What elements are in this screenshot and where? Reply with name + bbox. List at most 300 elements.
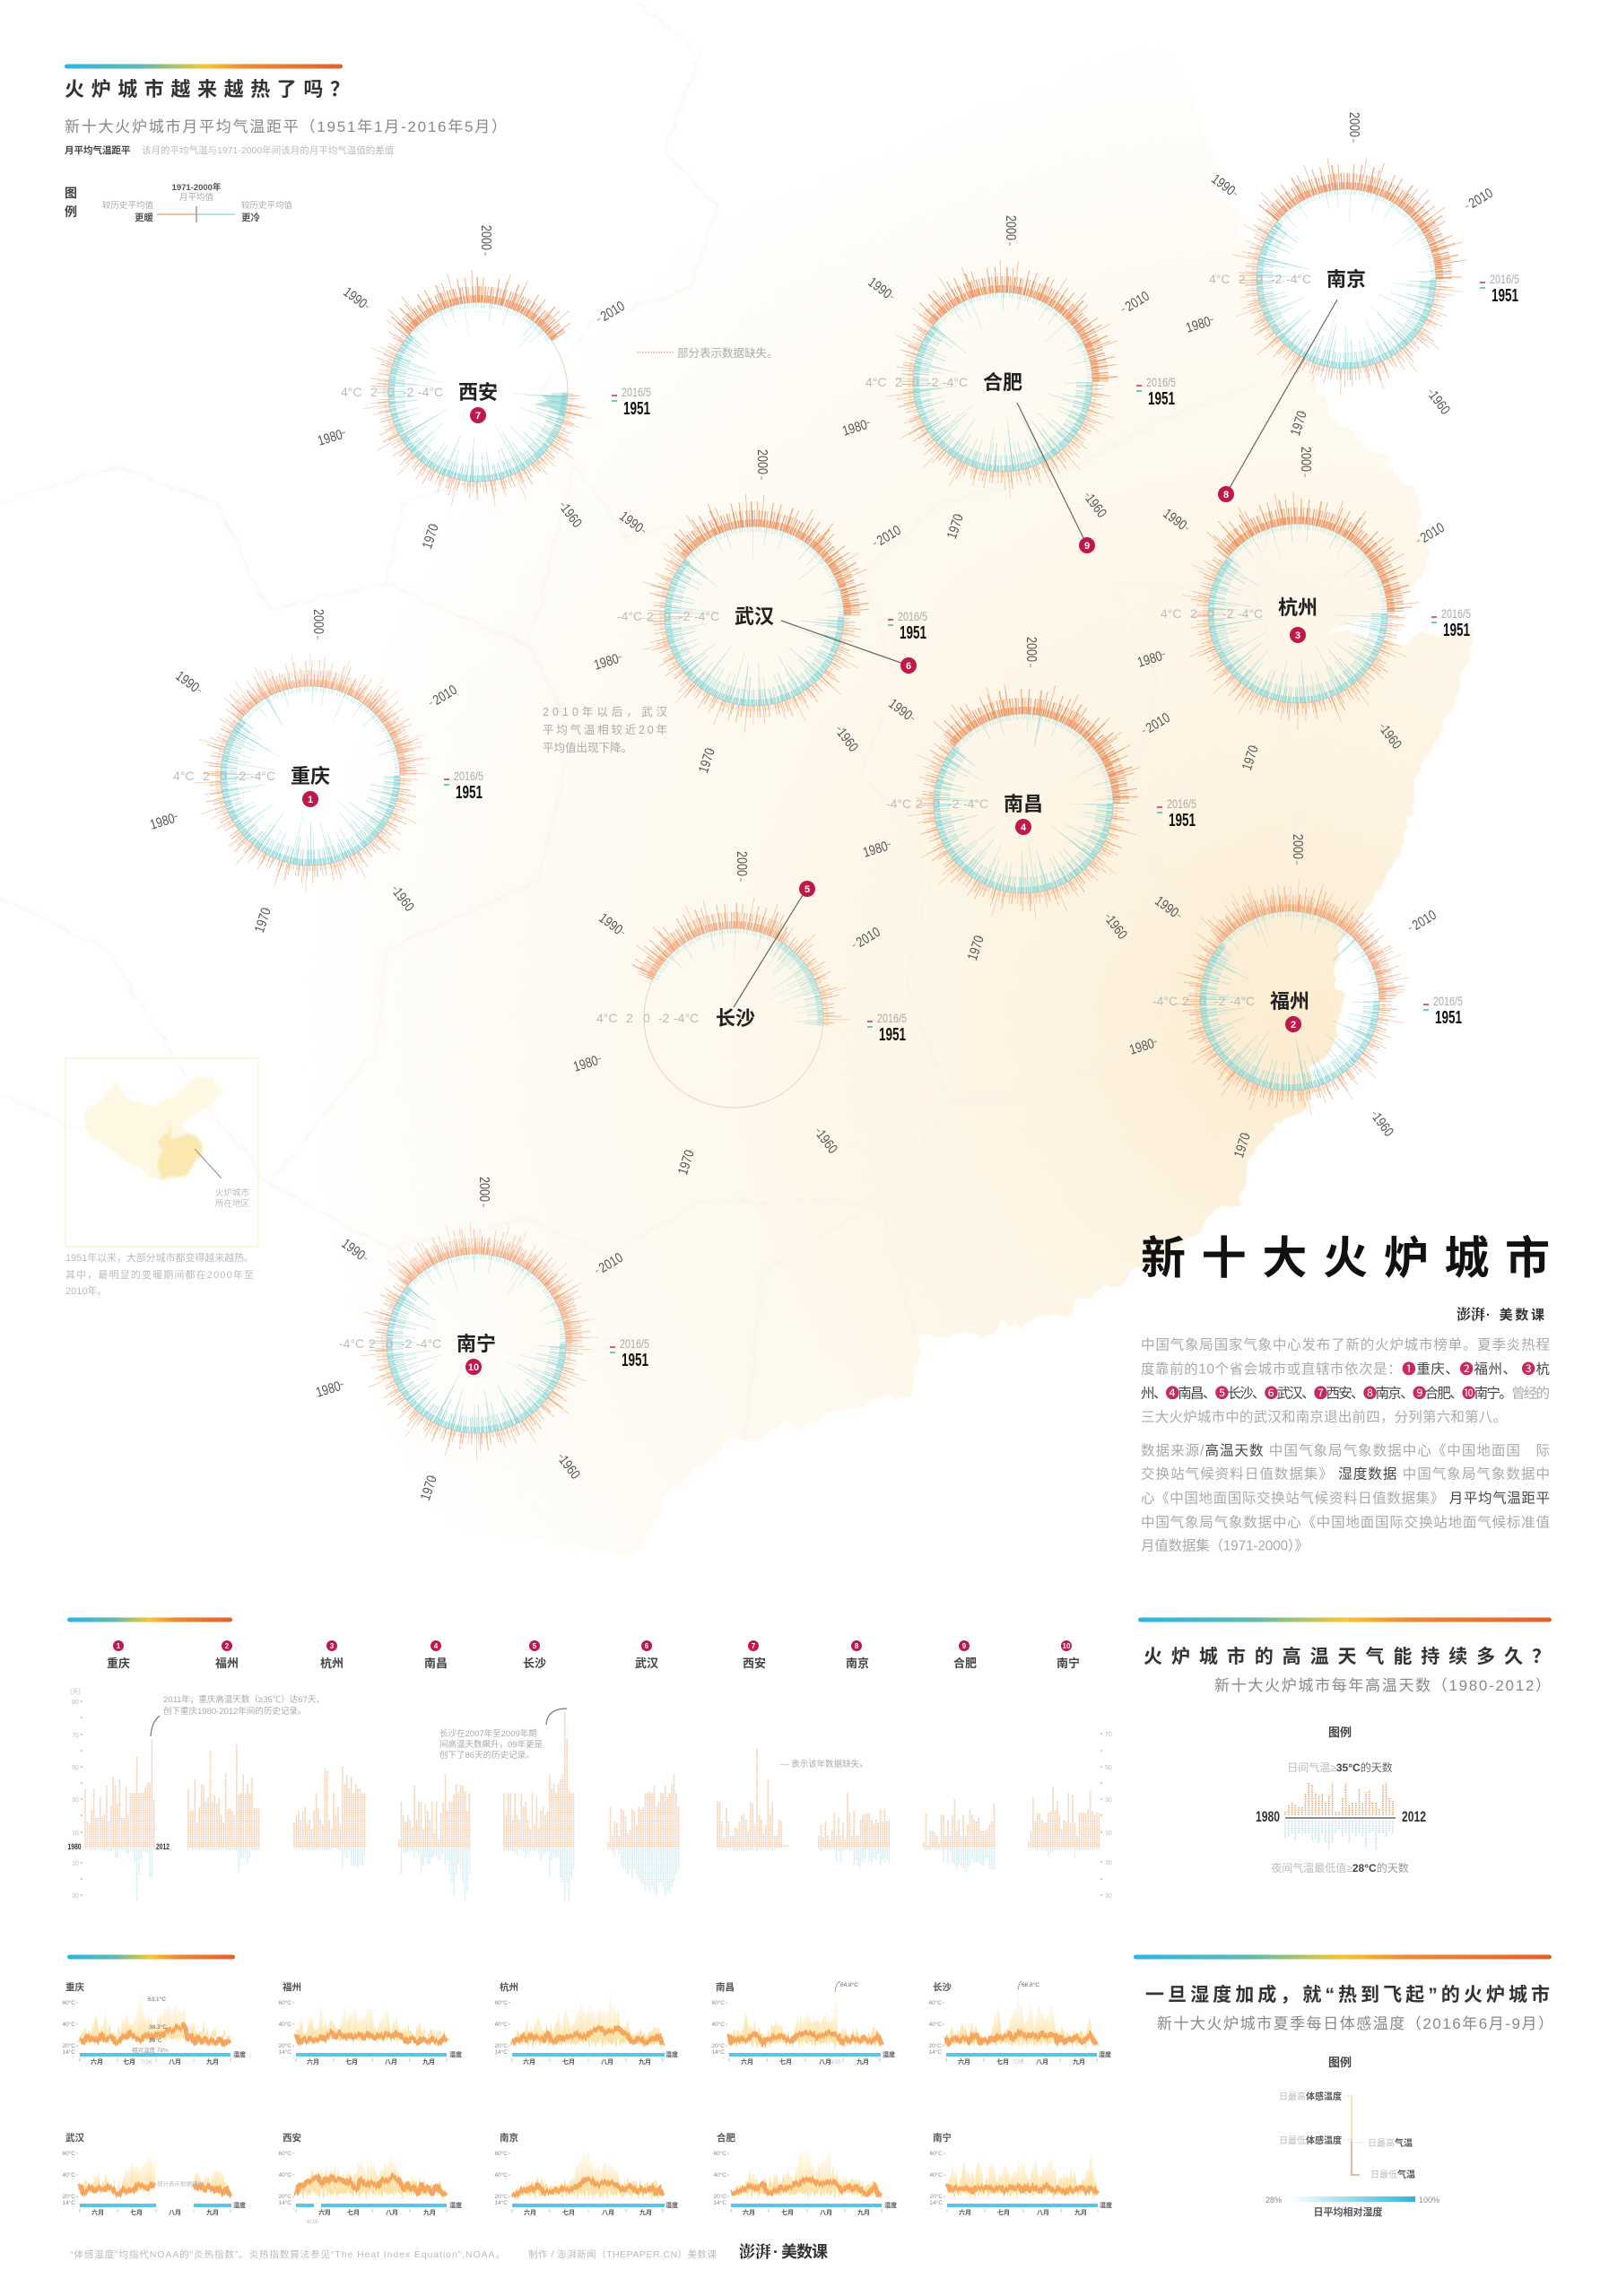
line chart: 合肥: 湿度 [884,2201,897,2209]
section 3 legend: 日最高体感温度 [1279,2091,1342,2102]
leader and badge: 武汉: 6 [906,661,911,672]
right axis: 50 [1105,1765,1112,1771]
chart: 长沙 radial [571,851,907,1177]
temperature scale: 4°C [596,1011,617,1025]
temperature scale: -4°C [1152,994,1178,1008]
line chart: 合肥: 六月 [743,2208,755,2216]
temperature scale [339,1336,441,1351]
line chart: 西安: 八月 [386,2209,398,2216]
section 3 legend: 日最低体感温度 [1279,2135,1342,2146]
line chart: 福州: 七月 [345,2057,358,2066]
year axis labels: 1970 [675,1148,698,1177]
year axis labels: 1960 [389,885,417,915]
year axis labels: 2000 [476,1177,491,1202]
note under inset: 其中，最明显的变暖期间都在2000年至 [65,1268,254,1281]
section 2 legend: 图例 [1328,1726,1352,1739]
year axis labels: 1980 [592,651,621,674]
footer logo [739,2239,828,2263]
main title: 新十大火炉城市 [1141,1233,1550,1283]
temperature scale: -4°C [617,609,642,623]
year axis labels: 1980 [316,427,344,449]
city header row: 2 [225,1642,230,1650]
line chart: 南昌: 七月 [779,2057,792,2066]
line chart: 合肥: 40°C [713,2171,726,2179]
temperature scale: 2 [1190,606,1197,621]
line chart: 长沙: 14°C [928,2048,942,2056]
line chart: 合肥: 七月 [781,2208,794,2216]
chart: 重庆 radial [148,609,483,935]
line chart: 南京: 南京 [500,2132,518,2144]
year axis labels: 1970 [944,512,967,541]
rank badge: 3 [1295,631,1300,641]
line chart: 福州: 福州 [283,1981,301,1993]
background: province boundaries [0,0,1399,1441]
rank badge [1290,627,1306,643]
temperature scale: -2 [1271,272,1283,286]
line chart: 南昌: 20°C [711,2042,725,2049]
line chart: 南京: 九月 [639,2208,652,2216]
line chart: 合肥: 14°C [713,2199,726,2206]
temperature scale: 0 [664,609,671,623]
temperature scale: -2 [679,609,691,623]
line chart: 福州: 60°C [278,1999,291,2006]
definition note: 该月的平均气温与1971-2000年间该月的月平均气温值的差值 [142,144,395,156]
rank badge [1285,1016,1301,1032]
line chart: 南宁: 20°C [929,2193,943,2200]
end years: 2016/5 [1490,272,1519,286]
end years: 1951 [1435,1008,1462,1028]
note under inset: 2010年。 [65,1284,107,1297]
data sources paragraph: 中国气象局气象数据中心《中国地面国际交换站地面气候标准值 [1141,1514,1550,1530]
end years: 2016/5 [1441,606,1471,621]
end years: 2016/5 [1167,796,1196,811]
line chart: 南昌: 湿度 [883,2050,895,2058]
line chart: 重庆: 重庆 [65,1981,84,1993]
temperature scale [341,385,443,399]
temperature scale: -4°C [886,796,911,811]
section 3 legend: 28% [1265,2196,1282,2205]
temperature scale: 2 [647,609,654,623]
intro paragraph [1141,1336,1550,1425]
line chart: 杭州: 湿度 [665,2050,678,2058]
year axis labels: 1980 [1127,1036,1156,1058]
year axis labels: 1970 [418,1474,440,1502]
right axis: 70 [1105,1732,1112,1738]
legend: radial chart: 例 [65,204,77,219]
temperature scale: -4°C [250,769,275,783]
section 3 legend: 图例 [1328,2056,1352,2069]
line chart: 重庆: 40°C [62,2021,75,2028]
line chart: 南昌: 八月 [819,2058,831,2066]
line chart: 杭州: 20°C [494,2042,508,2049]
year axis labels: 1970 [1288,409,1310,438]
end years: 2016/5 [454,769,483,783]
legend: radial chart [65,182,293,223]
city name: 西安 [458,381,498,404]
intro paragraph: 中国气象局国家气象中心发布了新的火炉城市榜单。夏季炎热程 [1141,1336,1550,1352]
line chart: 南宁: 八月 [1037,2209,1049,2216]
end years [1157,796,1196,831]
footer credit: 制作 / 澎湃新闻（THEPAPER.CN）美数课 [528,2248,718,2260]
year axis labels [840,215,1152,541]
year axis labels [1127,834,1439,1160]
line chart: 西安: 西安 [283,2132,301,2144]
year axis labels: 2010 [1123,289,1152,315]
line chart: 重庆 [62,1981,246,2066]
line chart: 合肥 [713,2132,897,2216]
temperature scale [865,375,968,389]
line chart: 南昌: 14°C [711,2048,725,2056]
section 2 legend [1256,1726,1426,1874]
annotation: 武汉 cooling [543,706,667,754]
end years: 1951 [1169,811,1196,831]
leader and badge: 武汉 [781,621,917,674]
chart: 南京 radial [1184,112,1519,438]
right axis: 30 [1105,1893,1112,1900]
line chart: 西安: 40°C [278,2171,291,2179]
line chart: 南京: 六月 [524,2208,536,2216]
temperature scale: 0 [387,385,395,399]
section 3 title: 一旦湿度加成，就“热到飞起”的火炉城市 [1145,1984,1550,2005]
city name: 南昌 [1004,793,1043,815]
year axis labels: 1980 [1184,314,1213,336]
year axis labels: 1960 [813,1127,840,1157]
callout: 重庆 record [151,1694,325,1736]
year axis labels [316,225,628,551]
year axis labels [571,851,883,1177]
bars: 长沙 [504,1712,573,1900]
line chart: 南昌: 8/20 [831,2060,841,2066]
logo [1457,1303,1544,1324]
line chart: 南京: 七月 [562,2208,575,2216]
line chart: 西安: 九月 [423,2208,436,2216]
background: southeast China land shape [224,36,1477,1555]
end years: 2016/5 [1146,375,1176,389]
legend: radial chart: 月平均值 [179,192,213,203]
year axis labels: 1990 [596,910,625,938]
line chart: 福州: 湿度 [449,2050,462,2058]
line chart: 重庆: 六月 [91,2057,103,2066]
line chart: 长沙: 20°C [928,2042,942,2049]
line chart: 西安 [278,2132,462,2225]
year axis labels [861,637,1173,962]
line chart: 长沙: 60°C [928,1999,942,2006]
city name: 南宁 [457,1333,496,1355]
line chart: 南京: 60°C [494,2150,508,2157]
line chart: 南宁: 南宁 [933,2132,952,2144]
legend: radial chart: 较历史平均值 [241,200,293,211]
section 1 subtitle: 新十大火炉城市月平均气温距平（1951年1月-2016年5月） [65,118,507,135]
temperature scale: 0 [220,769,227,783]
year axis labels: 1990 [865,274,894,302]
rank badge [1015,819,1031,835]
end years: 2016/5 [898,609,927,623]
year axis labels: 2000 [1003,215,1018,240]
leader and badge: 长沙 [734,881,815,1007]
line chart: 南京: 八月 [602,2209,614,2216]
end years: 2016/5 [1433,994,1463,1008]
line chart: 长沙: 40°C [928,2021,942,2028]
line chart: 合肥: 20°C [713,2193,726,2200]
line chart: 重庆: 20°C [62,2042,75,2049]
temperature scale: -2 [403,385,414,399]
chart: 合肥 radial [840,215,1176,541]
temperature scale: 4°C [341,385,362,399]
temperature scale: 2 [916,796,923,811]
year axis labels: 1980 [148,811,177,833]
year axis labels: 1980 [571,1053,600,1075]
line chart: 杭州 [494,1981,678,2066]
chart: 南昌 radial [861,637,1196,962]
section 2 legend: 1980 [1256,1808,1280,1825]
line chart: 武汉 [62,2132,246,2216]
bars: 杭州 [294,1766,364,1868]
year axis labels: 2000 [754,449,770,474]
section 2 title: 火炉城市的高温天气能持续多久？ [1144,1646,1551,1667]
chart: 福州 radial [1127,834,1463,1160]
temperature scale [1152,994,1255,1008]
note under inset: 1951年以来，大部分城市都变得越来越热。 [65,1251,254,1264]
end years [612,385,651,419]
line chart: 重庆: 七月 [123,2057,135,2066]
line chart: 武汉: 20°C [62,2193,75,2200]
section 2 right color bar [1138,1618,1552,1622]
line chart: 南京: 40°C [494,2171,508,2179]
section 2 left color bar [67,1618,232,1622]
section 3 legend [1265,2056,1439,2218]
line chart: 武汉: 部分表示数据缺失 [157,2179,204,2187]
line chart: 长沙: 六月 [958,2057,970,2066]
year axis labels: 2010 [1466,186,1496,212]
year axis labels: 1960 [555,1453,583,1483]
leader and badge: 南京 [1218,300,1337,502]
year axis labels: 2000 [1298,447,1313,472]
year axis labels: 1990 [1152,893,1181,921]
line chart: 重庆: 14°C [62,2048,75,2056]
year axis labels [314,1177,626,1502]
end years: 2016/5 [622,385,651,399]
temperature scale: -4°C [963,796,988,811]
section 3 legend: 100% [1419,2196,1439,2205]
end years: 1951 [1492,286,1518,306]
section 3 legend: 日最高气温 [1368,2137,1413,2149]
temperature scale: -2 [401,1336,413,1351]
end years: 1951 [1148,389,1175,409]
year axis labels: 1970 [965,934,987,962]
bars: 重庆 [85,1739,154,1900]
year axis labels: 2010 [596,1250,626,1276]
intro paragraph: 州、❹南昌、❺长沙、❻武汉、❼西安、❽南京、❾合肥、❿南宁。曾经的 [1141,1385,1550,1401]
line chart: 长沙: 七月 [996,2057,1009,2066]
temperature scale: 0 [386,1336,393,1351]
city header row: 1 [117,1642,121,1650]
inset: China locator map [65,1058,258,1247]
year axis labels: 1960 [557,501,585,531]
line chart: 合肥: 九月 [857,2208,870,2216]
right axis [1100,1732,1112,1900]
city header row: 7 [752,1642,756,1650]
line chart: 南昌: 64.8°C [840,1981,858,1988]
footer logo: 澎湃 [739,2239,771,2263]
bars: 合肥 [924,1799,994,1872]
year axis labels: 1990 [885,696,915,724]
bars: 武汉 [608,1775,678,1896]
year axis labels: 2000 [1290,834,1305,859]
city header row: 福州 [215,1657,239,1670]
section 3 legend: 日最低气温 [1370,2169,1415,2180]
line chart: 重庆: 湿度 [233,2050,246,2058]
line chart: 武汉: 湿度 [233,2201,246,2209]
left axis: 90 [72,1700,79,1706]
end years [1136,375,1176,409]
line chart: 南昌: 60°C [711,1999,725,2006]
temperature scale [1209,272,1311,286]
temperature scale [173,769,275,783]
temperature scale: 2 [370,385,378,399]
year axis labels [1184,112,1496,438]
line chart: 重庆: 38.3°C [149,2023,167,2031]
callout: 长沙 record: 间高温天数飙升，09年更是 [439,1739,544,1750]
annotation: missing data: 部分表示数据缺失。 [677,346,778,360]
year axis labels: 1960 [1369,1110,1396,1140]
line chart: 南宁 [929,2132,1112,2216]
line chart: 长沙: 九月 [1073,2057,1085,2066]
line chart: 武汉: 40°C [62,2171,75,2179]
temperature scale: 4°C [1161,606,1182,621]
section 1 title: 火炉城市越来越热了吗？ [65,78,350,100]
year axis labels: 1960 [1377,723,1405,752]
line chart: 南昌: 南昌 [716,1981,735,1993]
year axis labels [592,449,904,775]
line chart: 福州 [278,1981,462,2066]
city header row: 长沙 [523,1657,546,1670]
temperature scale: -2 [927,375,939,389]
callout: 重庆 record: 创下重庆1980-2012年间的历史记录。 [163,1706,306,1717]
year axis labels: 1960 [833,726,861,755]
temperature scale: 0 [1256,272,1263,286]
line chart: 南昌: 40°C [711,2021,725,2028]
line chart: 西安: 湿度 [449,2201,462,2209]
end years: 1951 [879,1025,906,1045]
data sources paragraph: 数据来源/高温天数 中国气象局气象数据中心《中国地面国 际 [1141,1442,1550,1458]
city header row: 南宁 [1057,1657,1080,1670]
temperature scale [886,796,988,811]
temperature scale: -4°C [694,609,719,623]
city header row: 西安 [743,1657,766,1670]
section 2 legend: 日间气温≥35°C的天数 [1287,1761,1393,1774]
end years [610,1336,649,1370]
city name: 南京 [1326,268,1366,291]
end years [444,769,483,803]
year axis labels [148,609,460,935]
definition note: 月平均气温距平 [65,144,131,156]
line chart: 长沙: 长沙 [933,1981,952,1993]
inset: China locator map: 火炉城市 [215,1187,250,1198]
city header row: 5 [533,1642,537,1650]
line chart: 重庆: 30°C [149,2037,162,2044]
right axis: 10 [1105,1860,1112,1866]
intro paragraph: 度靠前的10个省会城市或直辖市依次是：❶重庆、❷福州、 ❸杭 [1141,1361,1550,1378]
year axis labels: 1980 [314,1378,343,1401]
city header row: 武汉 [635,1657,658,1670]
temperature scale: 0 [912,375,919,389]
line chart: 南昌: 九月 [857,2057,869,2066]
line chart: 重庆: 八月 [169,2058,181,2066]
end years: 1951 [1443,621,1470,640]
leader and badge: 合肥 [1017,403,1095,553]
temperature scale: -2 [1222,606,1234,621]
temperature scale: -2 [948,796,960,811]
left axis: (天) [70,1688,81,1695]
line chart: 长沙: 66.8°C [1022,1981,1039,1988]
city name: 合肥 [983,371,1022,394]
line chart: 南昌 [711,1981,895,2066]
rank badge [302,791,318,807]
temperature scale: 2 [369,1336,376,1351]
chart: 南宁 radial [314,1177,649,1502]
temperature scale: 2 [895,375,902,389]
section 2 legend: 2012 [1402,1808,1426,1825]
year axis labels: 1960 [1082,491,1109,521]
city header row: 重庆 [107,1657,130,1670]
logo: · 美数课 [1486,1307,1544,1323]
city header row: 4 [434,1642,439,1650]
line chart: 福州: 八月 [385,2058,397,2066]
line chart: 重庆: 60°C [62,1999,75,2006]
year axis labels: 1970 [420,522,442,551]
city name: 重庆 [291,765,330,787]
line chart: 杭州: 60°C [494,1999,508,2006]
line chart: 杭州: 杭州 [500,1981,518,1993]
bars: 南京 [819,1793,889,1869]
line chart: 福州: 40°C [278,2021,291,2028]
temperature scale: -4°C [1238,606,1263,621]
year axis labels: 2010 [1410,908,1439,934]
year axis labels: 2000 [310,609,326,634]
line chart: 重庆: 九月 [206,2057,219,2066]
data sources paragraph: 心《中国地面国际交换站气候资料日值数据集》 月平均气温距平 [1141,1491,1550,1507]
line chart: 武汉: 武汉 [65,2132,84,2144]
section 2 legend: 夜间气温最低值≥28°C的天数 [1271,1861,1409,1874]
line chart: 福州: 14°C [278,2048,291,2056]
end years: 2016/5 [620,1336,649,1351]
legend: radial chart: 更暖 [135,212,153,223]
temperature scale: 4°C [173,769,194,783]
leader and badge: 合肥: 9 [1084,541,1090,552]
data sources paragraph [1141,1442,1550,1553]
rank badge [465,1359,482,1375]
line chart: 福州: 20°C [278,2042,291,2049]
year axis labels: 2010 [854,925,883,951]
temperature scale [596,1011,699,1025]
section 3 left color bar [67,1955,235,1959]
temperature scale: -4°C [674,1011,699,1025]
temperature scale: 0 [1199,994,1206,1008]
section 2 subtitle: 新十大火炉城市每年高温天数（1980-2012） [1214,1677,1551,1694]
year axis labels: 2000 [734,851,749,876]
temperature scale: 2 [1182,994,1189,1008]
footer logo: · 美数课 [773,2242,828,2261]
year axis labels: 1990 [1160,506,1189,534]
temperature scale: 4°C [1209,272,1231,286]
city header row: 南京 [846,1657,869,1670]
year axis labels: 1970 [696,746,718,775]
right axis: 10 [1105,1831,1112,1837]
temperature scale: -4°C [418,385,443,399]
footer note: “体感温度”均指代NOAA的“炎热指数”。炎热指数算法参见“The Heat Index Equation”,NOAA。 [70,2248,505,2260]
year axis labels: 2010 [1144,710,1173,736]
line chart: 武汉: 60°C [62,2150,75,2157]
